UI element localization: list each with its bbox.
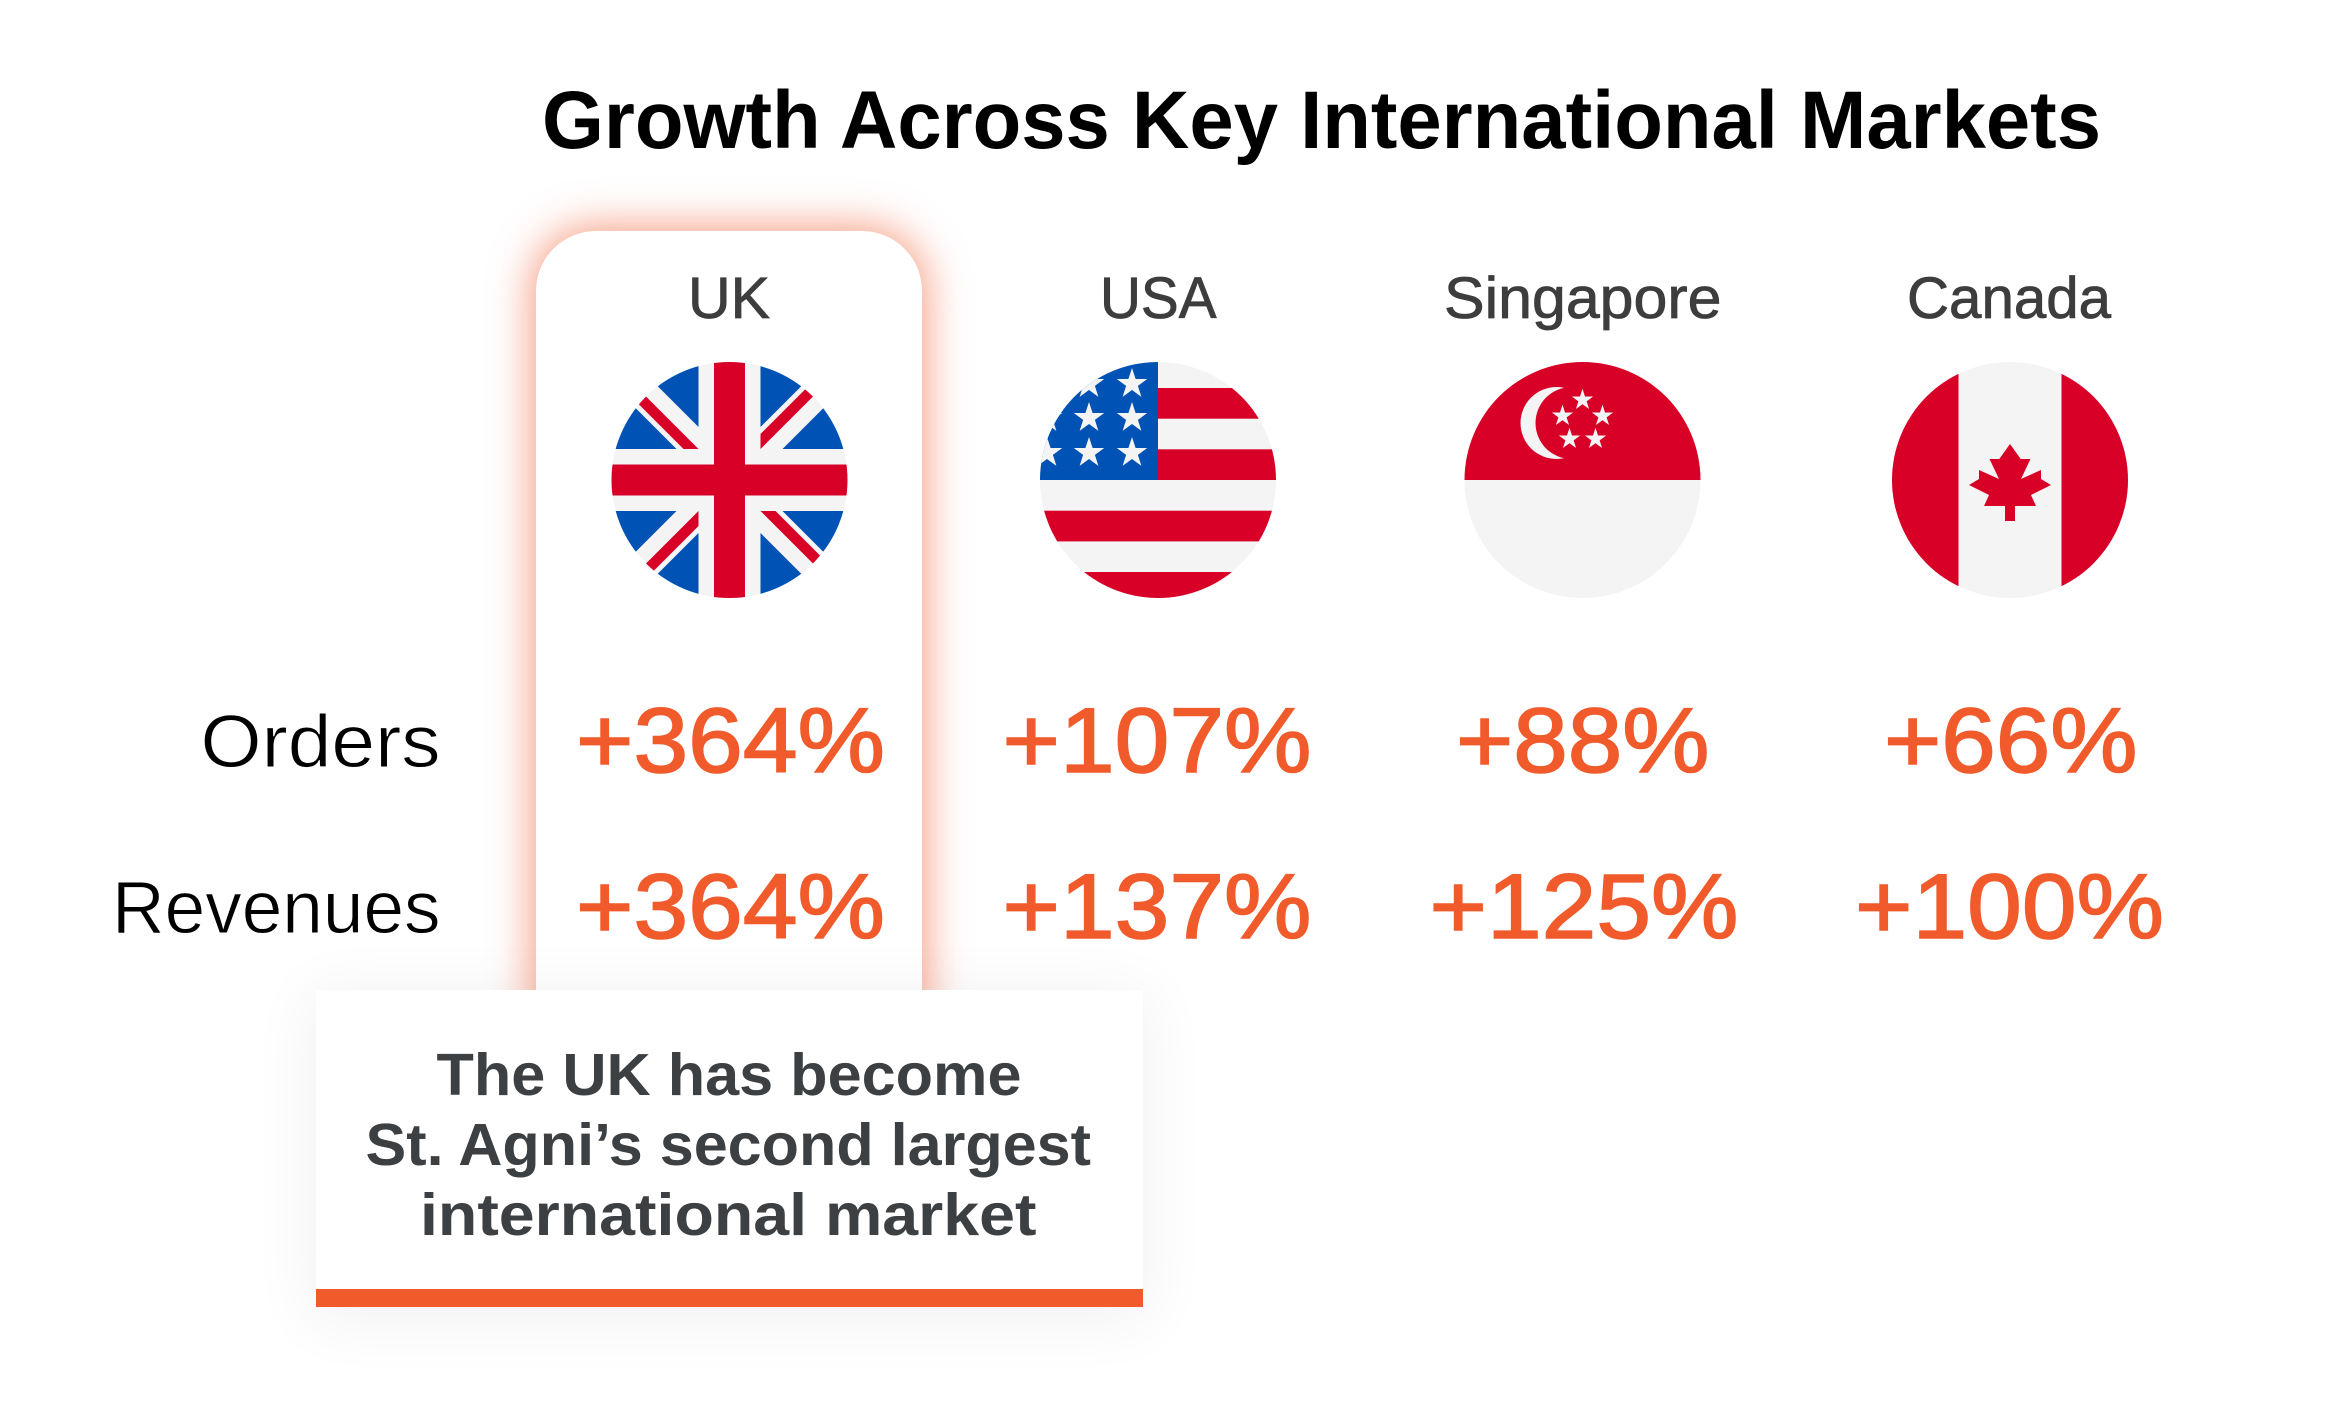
callout: UK insight: international market [420, 1182, 1036, 1248]
callout: UK insight: St. Agni’s second largest [366, 1112, 1091, 1178]
heading: Singapore: Singapore [1444, 266, 1722, 331]
icon: USA flag [1032, 360, 1278, 602]
heading: UK: UK [688, 266, 770, 331]
values: revenues row: +137% [1002, 856, 1312, 958]
title: Growth Across Key International Markets [542, 75, 2101, 166]
panel: UK highlight card [536, 231, 922, 1021]
values: orders row [576, 690, 2138, 792]
row label: Orders: Orders [200, 700, 440, 783]
values: orders row: +88% [1456, 690, 1710, 792]
values: revenues row: +125% [1430, 856, 1738, 958]
icon: Singapore flag [1462, 360, 1702, 600]
values: orders row: +364% [576, 690, 885, 792]
values: orders row: +66% [1884, 690, 2138, 792]
values: revenues row: +100% [1855, 856, 2164, 958]
row label: Revenues: Revenues [112, 866, 440, 949]
heading: USA: USA [1100, 266, 1217, 331]
values: orders row: +107% [1002, 690, 1312, 792]
icon: Canada flag [1890, 360, 2130, 600]
values: revenues row: +364% [576, 856, 885, 958]
callout: UK insight: The UK has become [436, 1042, 1022, 1108]
icon: UK flag [612, 362, 848, 598]
values: revenues row [576, 856, 2164, 958]
heading: Canada: Canada [1907, 266, 2112, 331]
callout: UK insight [316, 990, 1143, 1307]
